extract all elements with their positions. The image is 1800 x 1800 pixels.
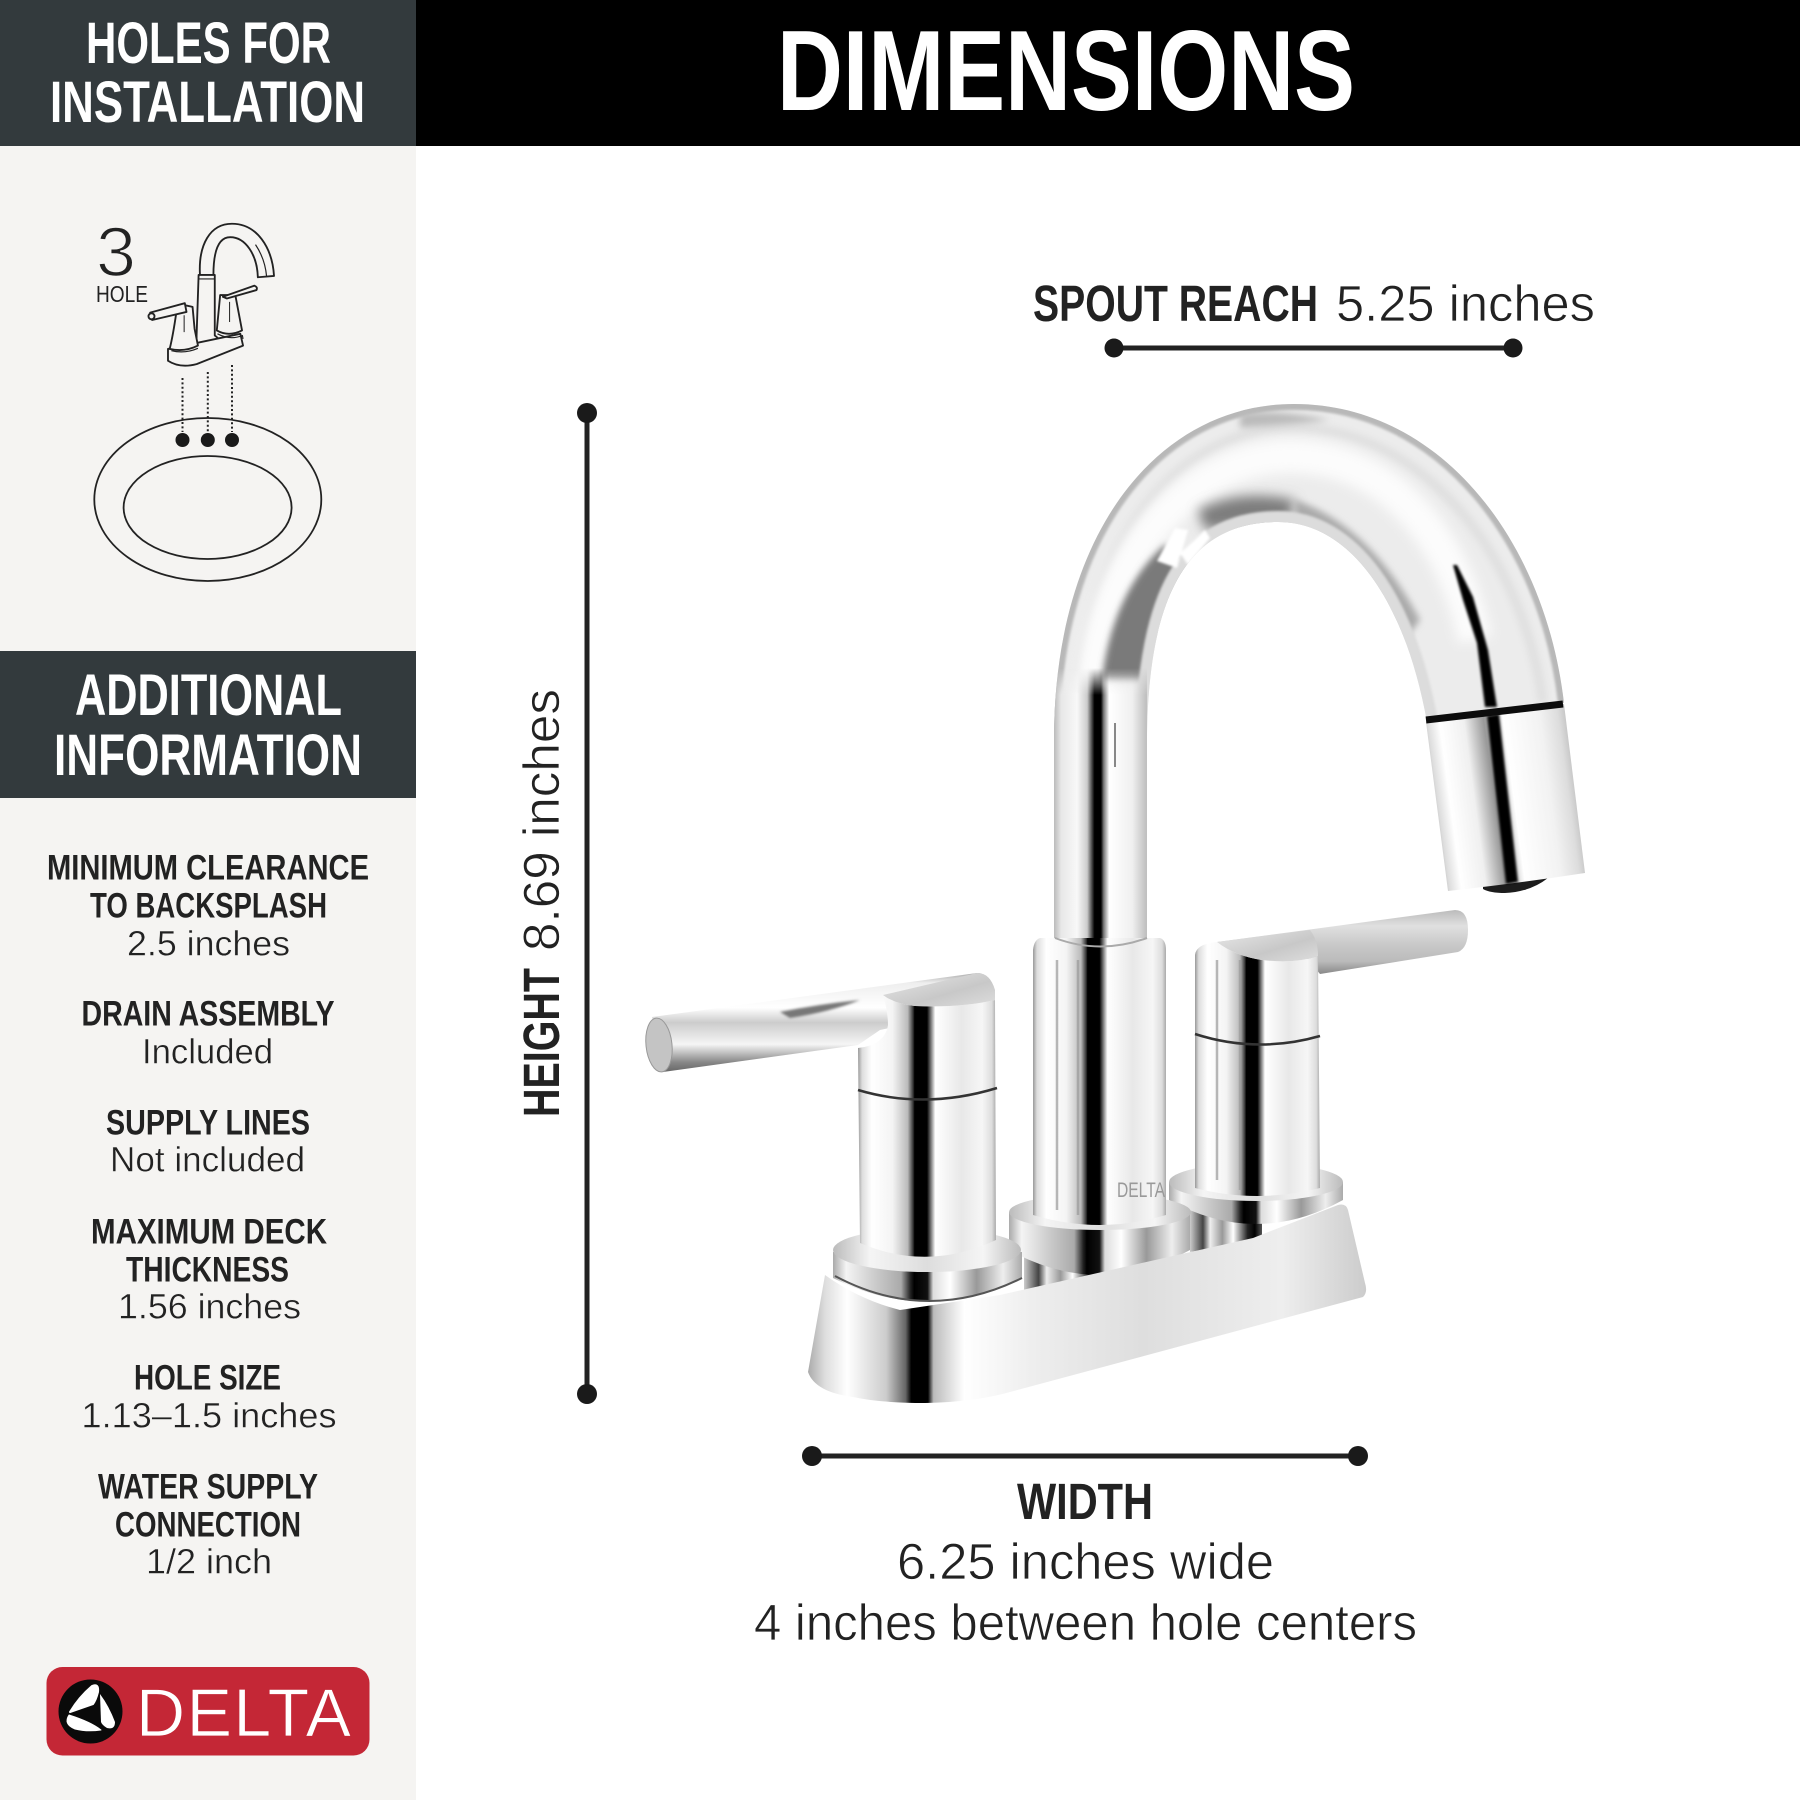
icon: sink with three holes <box>94 365 321 581</box>
icon: three hole count: HOLE <box>96 281 148 307</box>
spec: water supply connection: 1/2 inch <box>146 1542 272 1582</box>
spec: supply lines: Not included <box>110 1140 305 1180</box>
faucet illustration <box>643 390 1585 1403</box>
spec: maximum deck thickness: MAXIMUM DECK <box>91 1212 327 1252</box>
faucet spout arch <box>1054 404 1564 938</box>
left sidebar panel <box>0 0 416 1800</box>
dimension: spout reach <box>1033 275 1595 358</box>
dimension: height: HEIGHT <box>513 968 570 1117</box>
faucet spray head <box>1426 704 1585 893</box>
spec: hole size <box>82 1358 336 1436</box>
dimension: width: 4 inches between hole centers <box>754 1594 1417 1651</box>
faucet deck base <box>808 1205 1366 1403</box>
spec: drain assembly: Included <box>142 1032 273 1072</box>
heading: additional information: ADDITIONAL <box>75 663 342 728</box>
title bar: dimensions: DIMENSIONS <box>777 8 1355 135</box>
logo: delta: DELTA <box>136 1675 352 1751</box>
spec: maximum deck thickness: 1.56 inches <box>118 1288 301 1326</box>
spec: water supply connection: CONNECTION <box>115 1506 301 1544</box>
logo: delta <box>46 1667 370 1756</box>
title bar: dimensions <box>416 0 1800 146</box>
spec: drain assembly: DRAIN ASSEMBLY <box>82 994 334 1034</box>
spec: hole size: HOLE SIZE <box>134 1358 281 1398</box>
spec: minimum clearance <box>47 848 369 964</box>
faucet center column: DELTA <box>1117 1179 1165 1202</box>
spec: hole size: 1.13–1.5 inches <box>82 1396 336 1436</box>
spec: minimum clearance: MINIMUM CLEARANCE <box>47 848 369 888</box>
spec: drain assembly <box>82 994 334 1072</box>
text block: specification list <box>47 848 369 1582</box>
heading: additional information: INFORMATION <box>54 723 362 788</box>
icon: three hole count <box>96 213 148 307</box>
dimension: width <box>754 1446 1417 1651</box>
dimension: height <box>513 403 597 1404</box>
faucet black band <box>1426 704 1563 720</box>
spec: supply lines <box>106 1104 310 1180</box>
icon: faucet line drawing <box>148 224 274 366</box>
heading: additional information <box>0 651 416 798</box>
faucet left handle assembly <box>643 973 1022 1302</box>
dimension: width: WIDTH <box>1017 1473 1153 1530</box>
faucet center column <box>1009 938 1191 1295</box>
spec: maximum deck thickness: THICKNESS <box>126 1250 289 1290</box>
dimension: width: 6.25 inches wide <box>897 1533 1274 1590</box>
dimension: height: 8.69 inches <box>513 689 570 951</box>
spec: supply lines: SUPPLY LINES <box>106 1104 310 1142</box>
heading: holes for installation <box>0 0 416 146</box>
spec: water supply connection: WATER SUPPLY <box>98 1468 318 1506</box>
spec: water supply connection <box>98 1468 318 1582</box>
spec: minimum clearance: 2.5 inches <box>127 924 290 964</box>
spec: maximum deck thickness <box>91 1212 327 1326</box>
dimension: spout reach: SPOUT REACH <box>1033 275 1318 332</box>
heading: holes for installation: INSTALLATION <box>50 70 365 135</box>
dimension: spout reach: 5.25 inches <box>1336 275 1595 332</box>
icon: three hole count: 3 <box>96 213 136 291</box>
heading: holes for installation: HOLES FOR <box>86 11 331 76</box>
faucet right handle assembly <box>1169 910 1468 1252</box>
spec: minimum clearance: TO BACKSPLASH <box>90 886 327 926</box>
